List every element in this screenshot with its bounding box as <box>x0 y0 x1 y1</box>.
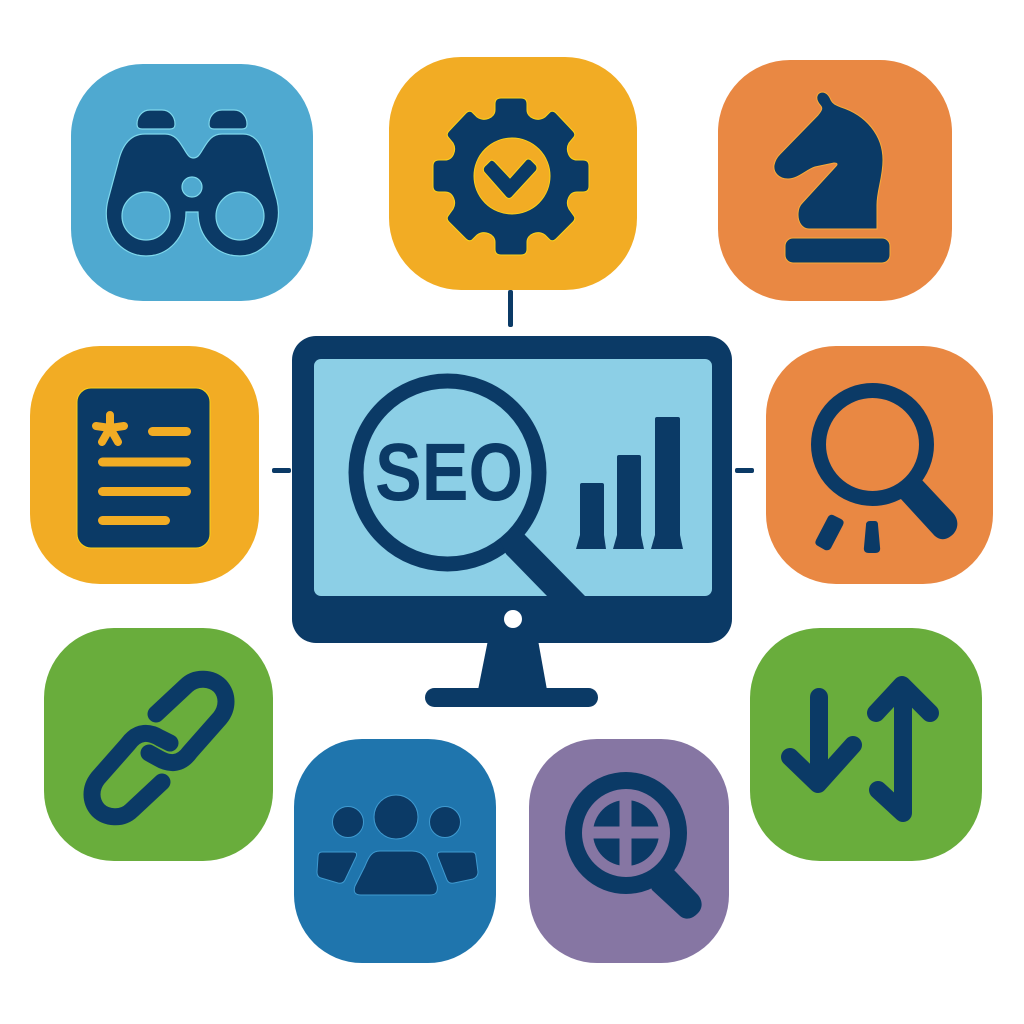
panel: gear check <box>389 57 637 290</box>
icon: up and down arrows <box>790 685 930 813</box>
connector: right <box>735 468 754 473</box>
icon: magnifier <box>815 390 957 553</box>
icon: chain link <box>92 679 226 817</box>
panel: binoculars <box>71 64 313 301</box>
stand <box>425 640 598 707</box>
panel: chain link <box>44 628 273 861</box>
magnifier <box>356 381 585 596</box>
panel: chess knight <box>718 60 952 301</box>
panel: document <box>30 346 259 584</box>
panel: magnifier <box>766 346 993 584</box>
icon: magnifier crosshair <box>574 780 702 919</box>
icon: people <box>317 795 478 895</box>
connector: left <box>272 468 291 473</box>
text lines <box>98 427 191 525</box>
panel: audience <box>294 739 496 963</box>
screen <box>314 359 712 596</box>
bar chart <box>576 417 683 549</box>
connector: top <box>508 290 513 327</box>
icon: gear <box>433 98 589 255</box>
icon: binoculars <box>106 110 278 256</box>
icon: knight <box>774 92 890 263</box>
panel: magnifier crosshair <box>529 739 729 963</box>
icon: star <box>96 415 124 442</box>
panel: arrows <box>750 628 982 861</box>
monitor <box>292 336 732 707</box>
power button <box>504 610 522 628</box>
frame <box>292 336 732 643</box>
SEO text: SEO <box>375 427 523 518</box>
icon: document <box>77 388 210 548</box>
